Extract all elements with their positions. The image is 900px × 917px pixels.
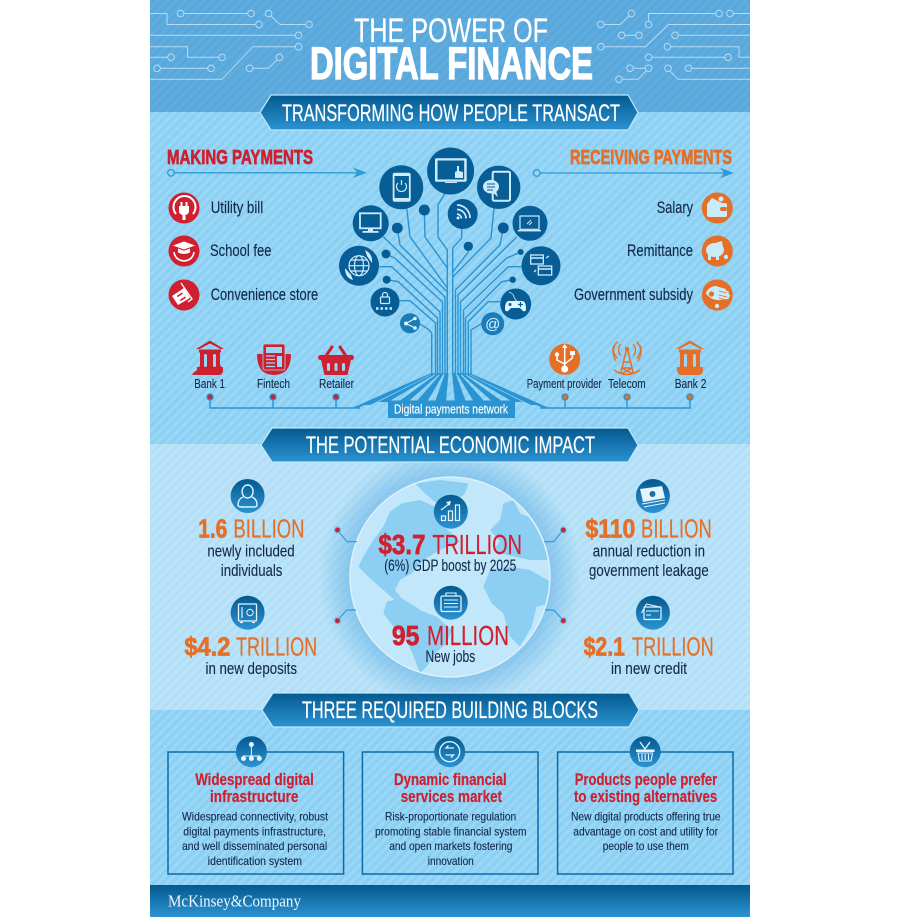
card: products people prefer: advantage on cost and utility for [573, 825, 718, 839]
card: dynamic financial services market: innovation [428, 854, 474, 868]
label: school fee: School fee [210, 241, 272, 260]
arrow: making payments [168, 169, 365, 177]
globe halo [318, 445, 582, 709]
heading: making payments: MAKING PAYMENTS [167, 147, 313, 169]
icon: network hierarchy [236, 736, 267, 767]
card: dynamic financial services market: Risk-proportionate regulation [385, 810, 516, 824]
text: new jobs: New jobs [426, 648, 475, 666]
chart: globe with central figures [350, 477, 553, 677]
card: products people prefer: Products people prefer [575, 771, 718, 789]
panel: footer [150, 885, 750, 917]
stat: 110 billion reduction in government leakage: BILLION [641, 514, 712, 544]
icon: at sign [481, 312, 504, 335]
figure: 3.7 trillion: TRILLION [432, 529, 522, 560]
icon: utility bill [168, 192, 200, 224]
label: telecom: Telecom [608, 376, 646, 391]
stat: 110 billion reduction in government leakage: $110 [586, 514, 635, 544]
stat: 4.2 trillion in new deposits [184, 596, 317, 678]
continents [358, 480, 553, 673]
panel: header background [150, 0, 750, 113]
label: bank 2: Bank 2 [675, 376, 706, 391]
icon: convenience store [168, 280, 200, 310]
icon: wifi [448, 199, 478, 229]
icon: government subsidy hand [702, 280, 733, 310]
stat: 1.6 billion newly included individuals: individuals [221, 562, 282, 580]
banner: transforming how people transact [260, 95, 638, 130]
stat: 4.2 trillion in new deposits: in new deposits [206, 660, 297, 678]
icon: shopping basket [630, 736, 661, 767]
stat: 2.1 trillion in new credit: TRILLION [632, 632, 714, 662]
stat: 4.2 trillion in new deposits: $4.2 [184, 632, 230, 662]
figure: 3.7 trillion [378, 529, 522, 560]
panel: potential economic impact [150, 444, 750, 711]
title: THE POWER OF [354, 12, 548, 50]
stat: 2.1 trillion in new credit [584, 596, 714, 678]
icon: fintech terminal [257, 344, 291, 375]
stat: 110 billion reduction in government leakage: government leakage [589, 562, 709, 580]
icon: telecom tower [613, 342, 641, 374]
stat: 110 billion reduction in government leakage: annual reduction in [593, 543, 705, 561]
card: widespread digital infrastructure: infrastructure [210, 788, 298, 806]
small node dots [382, 204, 524, 284]
stat: 4.2 trillion in new deposits: TRILLION [236, 632, 317, 662]
label: government subsidy: Government subsidy [574, 285, 693, 304]
tree branches [379, 193, 522, 375]
icon: desktop monitor [353, 205, 389, 241]
label: digital payments network: Digital payments network [394, 402, 508, 416]
icon: exchange arrows [434, 736, 465, 767]
card: dynamic financial services market: and open markets fostering [389, 839, 512, 853]
card: widespread digital infrastructure [168, 736, 344, 874]
panel: building blocks [150, 710, 750, 886]
card: dynamic financial services market [362, 736, 538, 874]
label: bank 1: Bank 1 [194, 376, 225, 391]
card: dynamic financial services market: promoting stable financial system [375, 825, 527, 839]
list: making payment items [168, 192, 318, 310]
icon: payment provider [549, 344, 580, 375]
icon: cards exchange [522, 246, 560, 285]
icon: bank 1 [192, 340, 224, 375]
icon: school fee [168, 236, 200, 266]
card: products people prefer: New digital products offering true [571, 810, 721, 824]
stat: 110 billion reduction in government leakage [586, 479, 712, 580]
footer logo: McKinsey & Company: McKinsey&Company [168, 892, 302, 910]
label: utility bill: Utility bill [211, 198, 263, 217]
label: retailer: Retailer [319, 376, 355, 391]
icon: credit cards [636, 596, 670, 630]
icon: globe arrows [339, 246, 379, 286]
figure: 95 million: 95 [392, 620, 419, 651]
figure: 95 million [392, 620, 509, 651]
stat: 2.1 trillion in new credit: in new credit [611, 660, 687, 678]
card: dynamic financial services market: services market [401, 788, 502, 806]
card: products people prefer [558, 736, 733, 874]
connectors: globe callouts [334, 527, 566, 624]
icon: gamepad [500, 288, 531, 320]
icon: bank 2 [676, 340, 704, 375]
participants: right [527, 340, 706, 400]
icon: smartphone power [379, 165, 423, 209]
label: fintech: Fintech [257, 376, 290, 391]
card: dynamic financial services market: Dynamic financial [394, 771, 507, 789]
card: widespread digital infrastructure: Widespread connectivity, robust [182, 810, 329, 824]
tree root rays [352, 373, 549, 408]
chart: digital tree network [339, 148, 560, 408]
network connector lines [210, 397, 690, 408]
icon: share [400, 313, 420, 333]
figure: 95 million: MILLION [427, 620, 509, 651]
node dots: left [207, 394, 339, 400]
stat: 1.6 billion newly included individuals: 1.6 [198, 514, 227, 544]
stat: 2.1 trillion in new credit: $2.1 [584, 632, 625, 662]
label: salary: Salary [657, 198, 693, 217]
heading: receiving payments: RECEIVING PAYMENTS [570, 147, 732, 169]
banner: the potential economic impact [261, 428, 638, 462]
figure: 3.7 trillion: $3.7 [378, 529, 426, 560]
stat: 1.6 billion newly included individuals: BILLION [233, 514, 305, 544]
stat: 1.6 billion newly included individuals [198, 479, 305, 580]
participants: left [192, 340, 355, 400]
panel: transforming how people transact [150, 112, 750, 445]
icon: salary wallet [702, 192, 733, 224]
icon: tablet touch [427, 148, 474, 194]
stat: 1.6 billion newly included individuals: newly included [207, 543, 295, 561]
list: receiving payment items [574, 192, 733, 310]
icon: laptop [512, 206, 548, 241]
card: widespread digital infrastructure: and well disseminated personal [182, 839, 327, 853]
circuit decoration: left [150, 10, 312, 79]
icon: safe [231, 596, 265, 630]
label: payment provider: Payment provider [527, 376, 602, 391]
arrow: receiving payments [533, 169, 732, 177]
icon: gdp chart [434, 495, 468, 529]
banner: three required building blocks: THREE REQUIRED BUILDING BLOCKS [302, 697, 598, 724]
icon: lock [370, 288, 400, 316]
icon: chat phone [477, 166, 520, 209]
node dots: right [562, 394, 693, 400]
card: products people prefer: to existing alternatives [574, 788, 717, 806]
icon: retailer basket [318, 347, 354, 375]
title: DIGITAL FINANCE [310, 38, 593, 89]
banner: transforming how people transact: TRANSFORMING HOW PEOPLE TRANSACT [282, 100, 620, 127]
icon: remittance piggy bank [702, 236, 733, 266]
heading: receiving payments [533, 147, 732, 177]
banner: the potential economic impact: THE POTENTIAL ECONOMIC IMPACT [306, 432, 595, 459]
card: widespread digital infrastructure: Widespread digital [195, 771, 314, 789]
card: products people prefer: people to use them [603, 839, 689, 853]
title [310, 12, 593, 89]
icon: person [231, 479, 265, 513]
label: convenience store: Convenience store [211, 285, 318, 304]
banner: three required building blocks [262, 693, 639, 727]
icon: cash [636, 479, 670, 513]
icon: briefcase [434, 586, 468, 620]
circuit decoration: right [598, 10, 750, 83]
text: gdp boost: (6%) GDP boost by 2025 [384, 557, 516, 575]
label: remittance: Remittance [627, 241, 693, 260]
card: widespread digital infrastructure: identification system [208, 854, 302, 868]
icon: at sign: @ [485, 316, 500, 333]
card: widespread digital infrastructure: digital payments infrastructure, [183, 825, 326, 839]
